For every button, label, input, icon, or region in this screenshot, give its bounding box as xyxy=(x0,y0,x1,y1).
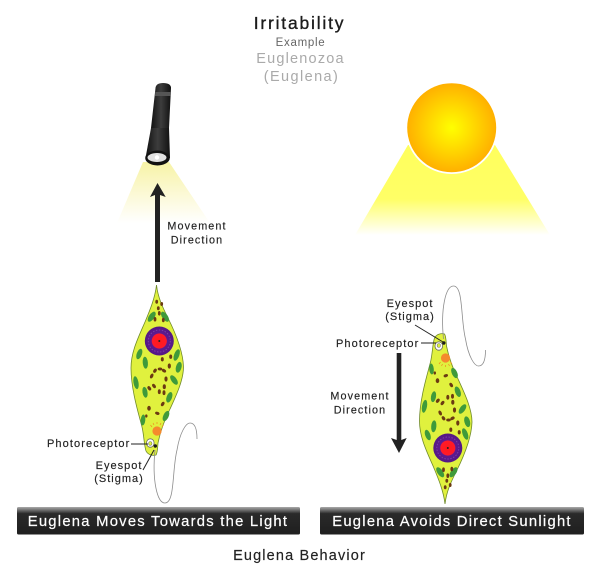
caption bar right xyxy=(320,507,584,534)
subtitle: Euglena: (Euglena) xyxy=(264,69,339,85)
label: movement direction right: Movement xyxy=(330,390,390,402)
arrow: movement up xyxy=(150,183,166,282)
icon: sun xyxy=(405,81,498,174)
arrow: movement down xyxy=(391,353,407,453)
pointer: eyespot right xyxy=(415,325,443,342)
pointer: photoreceptor right xyxy=(421,342,436,344)
euglena cell moving toward light xyxy=(131,285,197,503)
caption bar left xyxy=(17,507,300,534)
label: eyespot right: (Stigma) xyxy=(385,311,435,323)
label: eyespot left: Eyespot xyxy=(96,460,142,472)
euglena cell avoiding sunlight xyxy=(420,286,486,504)
title: Irritability xyxy=(254,13,345,33)
subtitle: example: Example xyxy=(276,37,325,49)
label: movement direction left: Movement xyxy=(167,220,227,232)
flashlight light beam xyxy=(117,162,210,223)
icon: flashlight xyxy=(145,83,171,166)
label: movement direction right: Direction xyxy=(334,404,386,416)
label: photoreceptor left: Photoreceptor xyxy=(47,438,130,450)
sun light beam xyxy=(355,145,550,235)
footer title: Euglena Behavior xyxy=(233,548,366,564)
label: photoreceptor right: Photoreceptor xyxy=(336,338,419,350)
label: movement direction left: Direction xyxy=(171,234,223,246)
pointer: eyespot left xyxy=(143,450,154,470)
subtitle: Euglenozoa: Euglenozoa xyxy=(256,51,345,67)
label: eyespot right: Eyespot xyxy=(387,298,433,310)
pointer: photoreceptor left xyxy=(131,443,148,445)
caption bar right: Euglena Avoids Direct Sunlight xyxy=(332,514,572,530)
label: eyespot left: (Stigma) xyxy=(94,473,144,485)
caption bar left: Euglena Moves Towards the Light xyxy=(28,514,288,530)
